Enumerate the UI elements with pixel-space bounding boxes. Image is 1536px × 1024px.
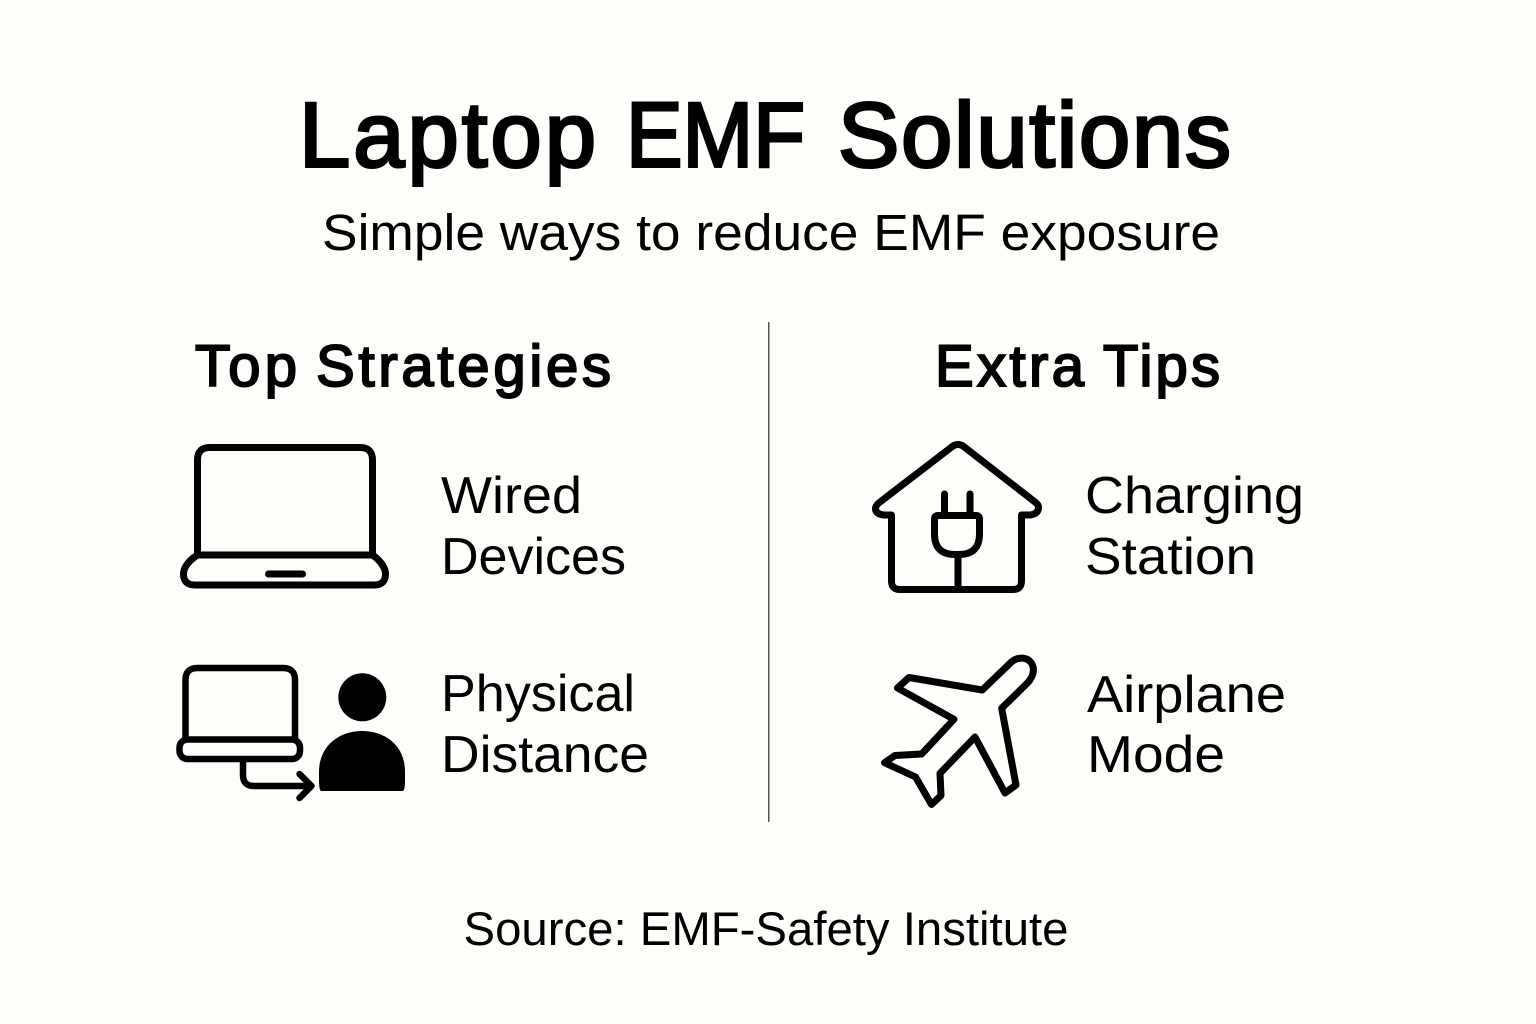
source: Source: EMF-Safety Institute (464, 902, 1068, 955)
column divider (768, 322, 770, 822)
title: Solutions (838, 84, 1231, 186)
left column heading: Strategies (316, 334, 611, 399)
label: charging station (1085, 467, 1304, 586)
label: physical distance: Distance (441, 726, 649, 784)
label: physical distance (441, 665, 649, 784)
label: airplane mode: Mode (1087, 726, 1225, 784)
icon: airplane (884, 658, 1033, 804)
right column heading: Tips (1103, 334, 1220, 399)
label: airplane mode: Airplane (1087, 666, 1286, 724)
subtitle: Simple ways to reduce EMF exposure (322, 204, 1220, 261)
left column heading: Top (195, 334, 297, 399)
label: physical distance: Physical (441, 665, 635, 723)
icon: house with plug (875, 444, 1039, 590)
icon: laptop and person distance (180, 668, 405, 798)
title (299, 84, 1231, 186)
right column heading: Extra (935, 334, 1085, 399)
label: wired devices: Wired (441, 467, 582, 525)
title: Laptop (299, 84, 596, 186)
label: charging station: Charging (1085, 467, 1304, 525)
label: wired devices (441, 467, 626, 586)
icon: laptop (184, 448, 386, 585)
label: wired devices: Devices (441, 528, 626, 586)
title: EMF (626, 84, 805, 186)
label: charging station: Station (1085, 528, 1256, 586)
label: airplane mode (1087, 666, 1286, 784)
right column heading (935, 334, 1220, 399)
